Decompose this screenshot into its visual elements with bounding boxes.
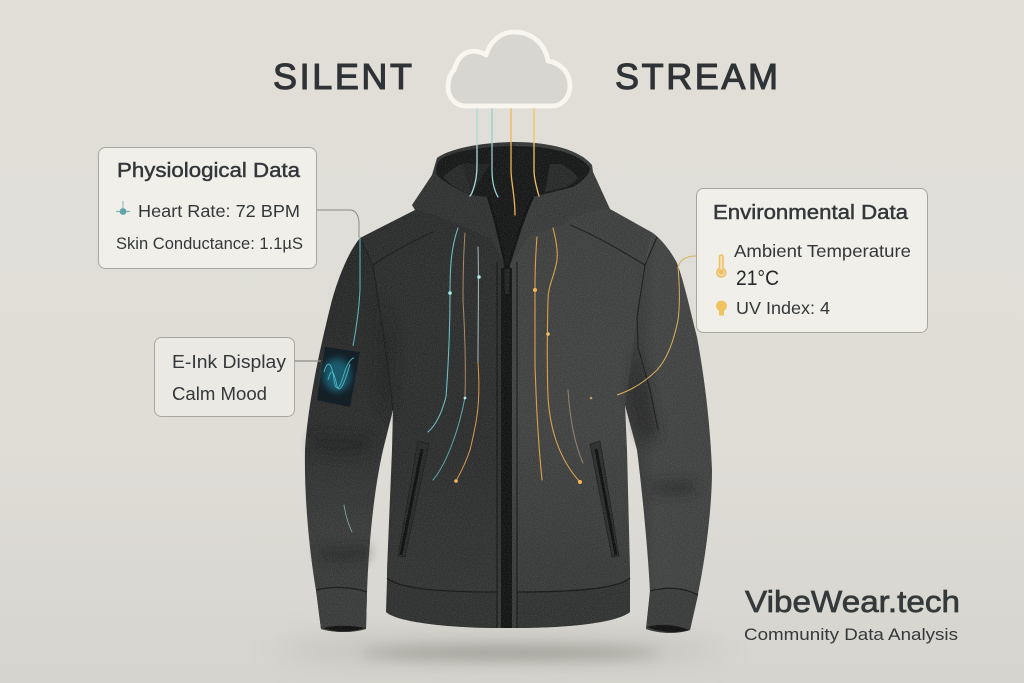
panel box (696, 188, 928, 332)
jacket: cuff seams (316, 588, 698, 595)
panel: environmental data (696, 188, 928, 332)
stream: left teal fibre (428, 228, 458, 432)
connector: e-ink display (294, 360, 321, 362)
jacket: armhole seams (360, 225, 658, 430)
display glow (323, 358, 351, 392)
jacket: hood opening (436, 146, 590, 268)
jacket: left pocket (398, 441, 429, 557)
jacket: inner lining right (545, 164, 578, 192)
panel: e-ink display (154, 338, 294, 416)
panel box (154, 338, 294, 416)
jacket: left cuff (316, 588, 367, 632)
jacket: zipper pull (504, 268, 510, 295)
display label: E-Ink Display (172, 352, 286, 372)
stream: sleeve fibre (344, 505, 352, 532)
jacket: collar flaps (488, 197, 533, 268)
panel box (98, 148, 316, 268)
temperature value: 21°C (736, 267, 779, 290)
jacket: body left panel (360, 200, 507, 628)
data streams: teal and amber fibres (344, 108, 583, 532)
tagline: Community Data Analysis (744, 625, 958, 644)
connector: environmental data (617, 256, 696, 395)
e-ink sleeve display (317, 347, 360, 407)
heading: Environmental Data (713, 202, 909, 224)
jacket: hem seam (387, 578, 630, 592)
jacket: left sleeve (305, 238, 400, 632)
icon: UV bulb (716, 301, 727, 316)
connector: physiological data to display (317, 210, 360, 346)
display waveform (324, 358, 354, 389)
mood label: Calm Mood (172, 384, 267, 404)
jacket: hem left (386, 580, 497, 628)
jacket: hem right (517, 580, 630, 628)
stream: right amber fibres (535, 228, 583, 482)
cloud icon (448, 32, 570, 106)
jacket: inner lining left wide (462, 164, 490, 195)
title: SILENT: SILENT (273, 56, 412, 97)
brand: VibeWear.tech: VibeWear.tech (745, 584, 960, 619)
heart rate reading: Heart Rate: 72 BPM (138, 201, 300, 221)
jacket: hood right (505, 142, 610, 268)
heading: Physiological Data (117, 160, 301, 182)
temperature label: Ambient Temperature (734, 241, 911, 261)
jacket: right pocket (590, 441, 619, 557)
panel: physiological data (98, 148, 316, 268)
jacket: inner lining left (443, 163, 476, 195)
icon: thermometer (717, 255, 726, 277)
jacket (304, 142, 712, 633)
stream: cloud to collar (470, 108, 539, 215)
jacket: body right panel (507, 200, 653, 628)
jacket: hood left (412, 142, 515, 268)
icon: heart rate (116, 201, 130, 215)
title: STREAM: STREAM (615, 56, 778, 97)
jacket: cuff openings (323, 625, 689, 632)
jacket: zipper lines (497, 262, 517, 628)
jacket: right sleeve (620, 233, 712, 633)
jacket: zipper teeth (501, 268, 512, 628)
jacket: right cuff (646, 588, 698, 633)
jacket: sleeve folds (312, 300, 695, 561)
UV index reading: UV Index: 4 (736, 298, 830, 318)
jacket: fabric texture (305, 142, 712, 633)
stream: left amber fading into teal (433, 233, 465, 480)
stream: pale fibre fading into amber (456, 247, 479, 481)
display panel (317, 347, 360, 407)
skin conductance reading: Skin Conductance: 1.1µS (116, 234, 303, 253)
stream nodes (448, 275, 592, 484)
floor shadow (275, 638, 725, 662)
